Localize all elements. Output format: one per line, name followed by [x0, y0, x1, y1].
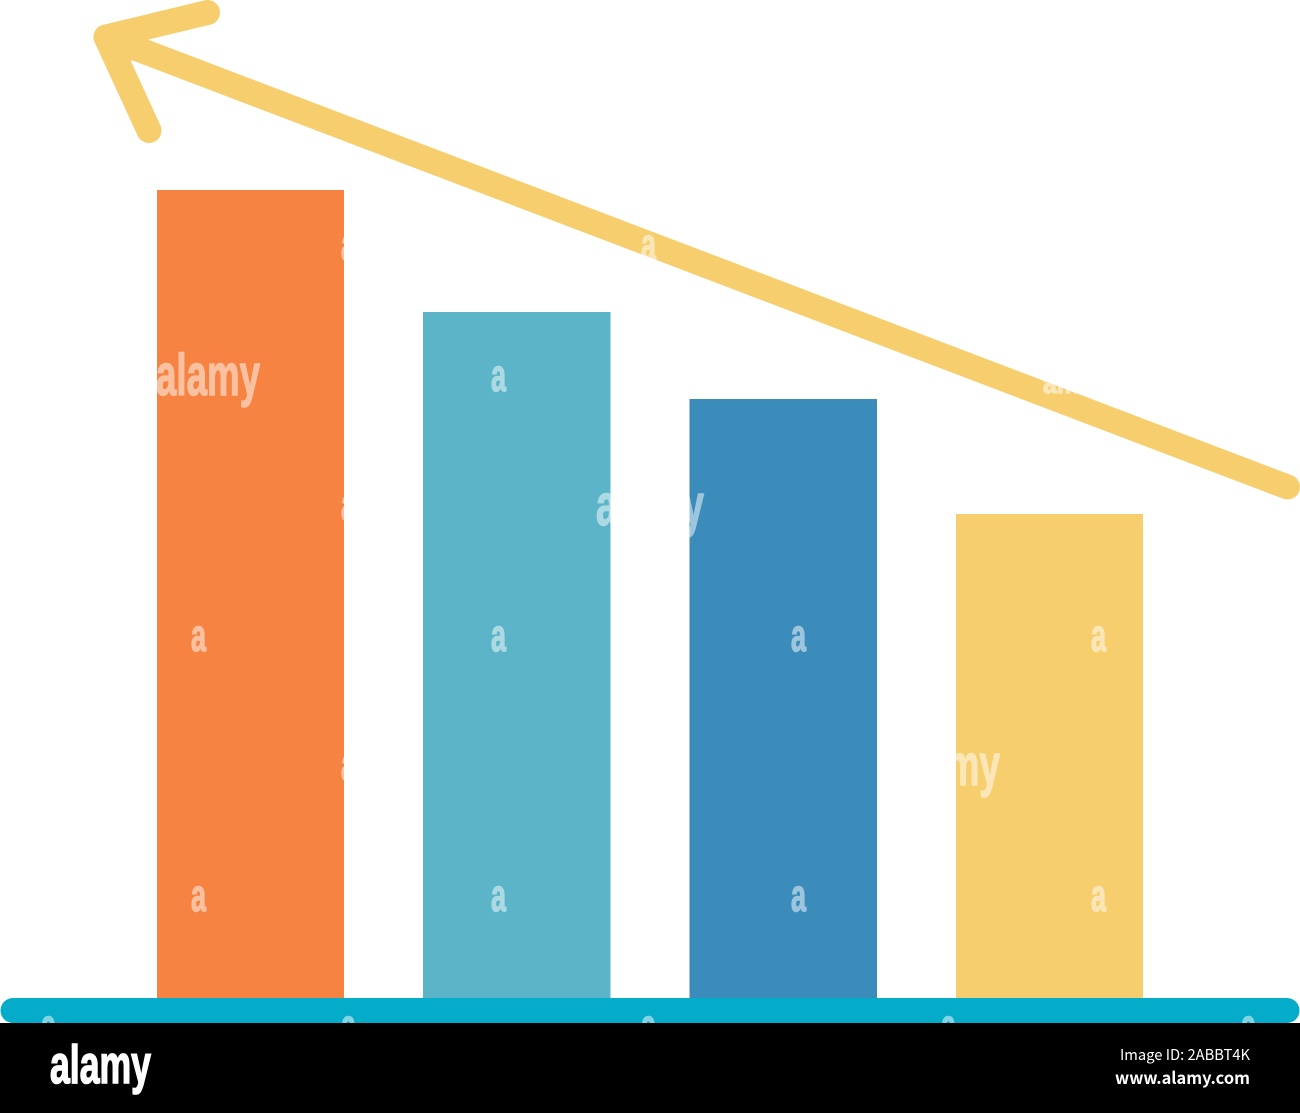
watermark pattern: a [791, 610, 807, 661]
watermark pattern: a [1091, 870, 1107, 921]
watermark pattern: a [1091, 610, 1107, 661]
watermark pattern: alamy [895, 733, 1000, 798]
baseline axis [0, 998, 1300, 1023]
watermark pattern: alamy [156, 343, 260, 408]
footer logo: alamy [50, 1035, 151, 1095]
watermark pattern: am [1043, 367, 1079, 400]
watermark pattern: a [41, 1000, 57, 1051]
watermark pattern: a [341, 1000, 357, 1051]
watermark pattern: a [341, 219, 357, 270]
bar 3: blue [690, 399, 877, 1000]
watermark pattern: a [641, 1000, 657, 1051]
watermark pattern: a [641, 219, 657, 270]
arrow: descending trend [106, 12, 1288, 487]
image id: Image ID: 2ABBT4K [1120, 1044, 1250, 1065]
watermark pattern: a [491, 870, 507, 921]
watermark pattern: a [191, 610, 207, 661]
watermark pattern: a [191, 870, 207, 921]
bar 4: yellow [956, 514, 1143, 1000]
watermark pattern: a [791, 870, 807, 921]
watermark pattern: a [941, 1000, 957, 1051]
footer band [0, 1023, 1300, 1113]
watermark pattern: a [341, 739, 357, 790]
watermark pattern: alamy [596, 473, 704, 538]
bar 1: orange [157, 190, 344, 1000]
bar 2: teal [423, 312, 610, 1000]
watermark pattern [41, 219, 1257, 1051]
watermark pattern: a [491, 350, 507, 401]
website: www.alamy.com [1115, 1065, 1250, 1089]
watermark pattern: a [491, 610, 507, 661]
watermark pattern: a [1241, 1000, 1257, 1051]
watermark pattern: a [341, 479, 357, 530]
